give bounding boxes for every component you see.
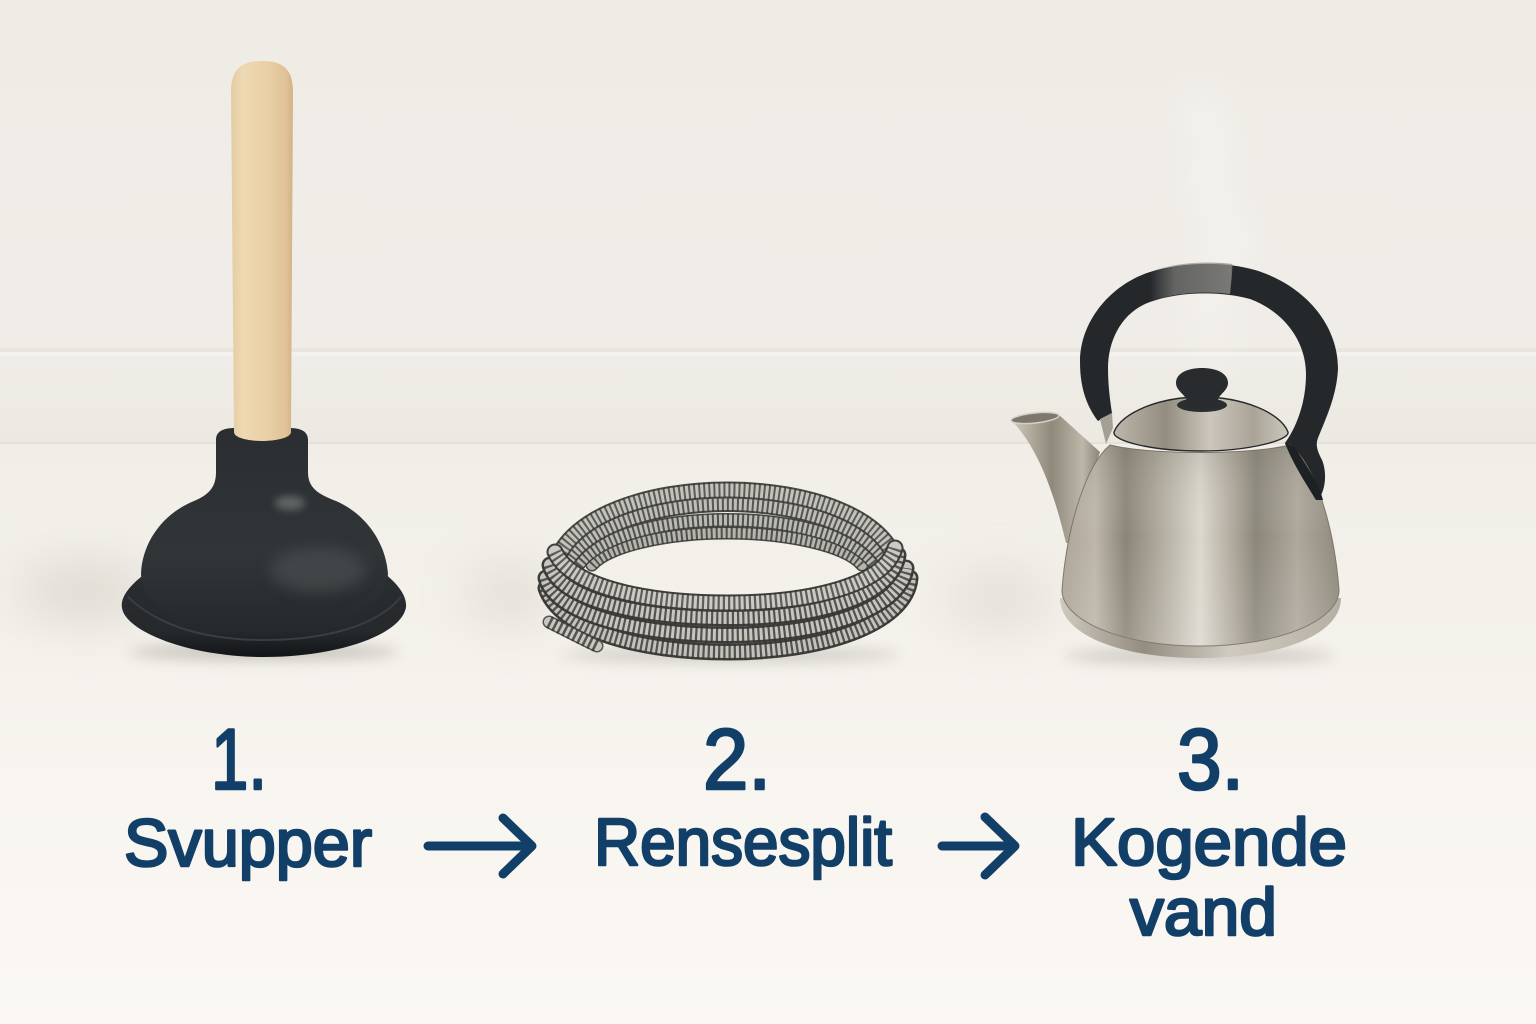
steam over handle (1150, 262, 1233, 302)
kettle lid (1114, 397, 1288, 451)
spout opening (1011, 411, 1059, 425)
arrow 1 to 2 (428, 818, 532, 874)
arrow 2 to 3 (942, 817, 1015, 875)
word Svupper: Svupper (124, 806, 372, 881)
handle connector (1100, 413, 1113, 444)
number 3: 3. (1177, 712, 1244, 808)
kettle base rim (1060, 598, 1341, 658)
kettle handle (1080, 264, 1338, 500)
lid washer (1177, 398, 1227, 412)
step 2 label (594, 712, 892, 880)
number 1: 1. (211, 712, 267, 808)
handle lower bracket (1285, 443, 1323, 500)
icon: plunger (122, 61, 406, 657)
countertop (0, 442, 1536, 1024)
step 1 label (124, 712, 372, 881)
icon: drain snake coil (546, 490, 910, 652)
number 2: 2. (703, 712, 771, 808)
steam (1200, 110, 1232, 350)
plunger dome (141, 428, 388, 636)
wooden handle (231, 61, 293, 441)
body shading (1062, 445, 1339, 646)
icon: kettle with steam (1011, 110, 1341, 658)
coil front strands (546, 548, 910, 652)
dome highlights (128, 496, 401, 640)
coil back strands (555, 490, 897, 565)
lid knob (1176, 368, 1228, 408)
word Kogende: Kogende (1071, 805, 1347, 880)
word Rensesplit: Rensesplit (594, 805, 892, 880)
kettle body (1062, 445, 1339, 646)
plunger flange (122, 573, 406, 657)
coil loose tip (549, 622, 597, 646)
background wall (0, 0, 1536, 350)
kettle spout (1012, 414, 1100, 543)
step 3 label (1071, 712, 1347, 950)
word vand: vand (1130, 875, 1277, 950)
object shadows (15, 564, 1335, 663)
skirting board (0, 348, 1536, 444)
